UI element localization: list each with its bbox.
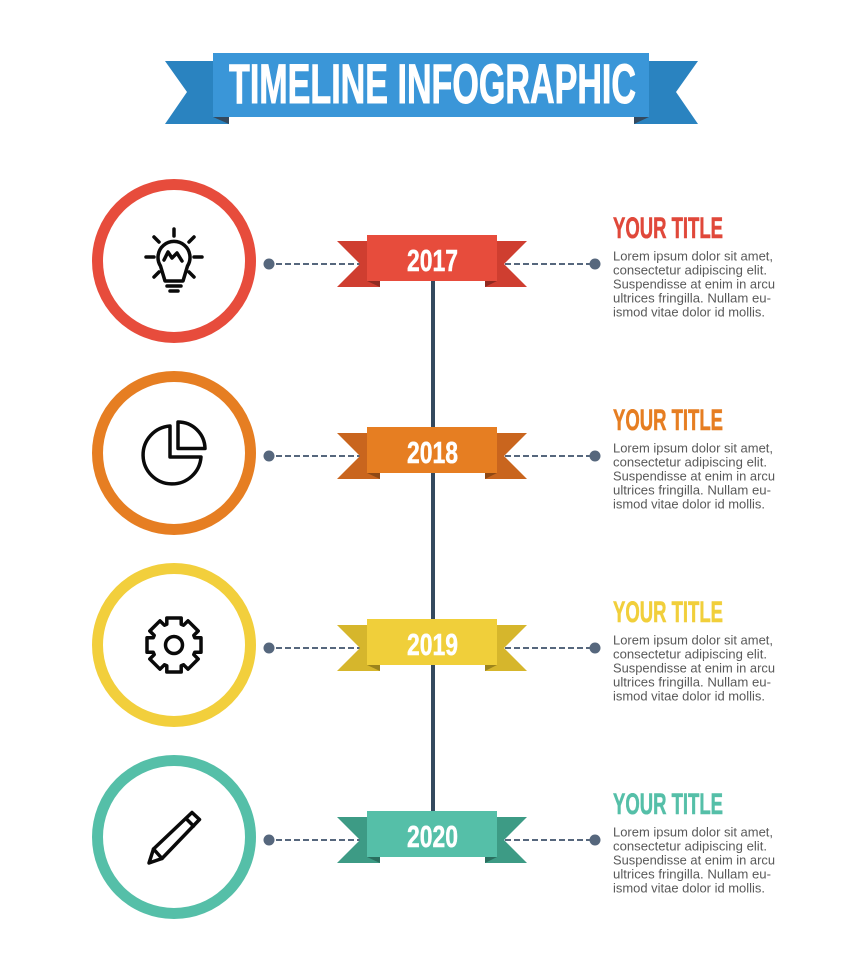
- milestone 2017: [98, 184, 775, 338]
- icon: pie chart: [143, 422, 205, 484]
- timeline vertical line: [431, 281, 435, 813]
- text block 2020: consectetur adipiscing elit.: [613, 840, 767, 854]
- text block 2017: Lorem ipsum dolor sit amet,: [613, 250, 773, 264]
- ribbon 2019: 2019: [407, 627, 458, 662]
- text block 2020: [613, 788, 775, 896]
- ribbon 2017: 2017: [407, 243, 458, 278]
- circle: 2017: [98, 184, 250, 338]
- text block 2019: Suspendisse at enim in arcu: [613, 662, 775, 676]
- text block 2017: Suspendisse at enim in arcu: [613, 278, 775, 292]
- text block 2020: ultrices fringilla. Nullam eu-: [613, 868, 771, 882]
- text block 2017: YOUR TITLE: [613, 212, 723, 245]
- text block 2018: Suspendisse at enim in arcu: [613, 470, 775, 484]
- text block 2017: ultrices fringilla. Nullam eu-: [613, 292, 771, 306]
- title banner: [165, 52, 698, 124]
- text block 2019: consectetur adipiscing elit.: [613, 648, 767, 662]
- ribbon 2020: 2020: [407, 819, 458, 854]
- connector right 2018: [505, 450, 600, 462]
- ribbon 2018: 2018: [407, 435, 458, 470]
- text block 2018: YOUR TITLE: [613, 404, 723, 437]
- connector left 2020: [264, 834, 360, 846]
- milestone 2019: [98, 568, 775, 722]
- icon: gear: [147, 618, 201, 672]
- text block 2019: [613, 596, 775, 704]
- circle: 2018: [98, 376, 250, 530]
- milestone 2020: [98, 760, 775, 914]
- milestone 2018: [98, 376, 775, 530]
- connector left 2018: [264, 450, 360, 462]
- text block 2018: ismod vitae dolor id mollis.: [613, 498, 765, 512]
- icon: pencil: [149, 812, 200, 863]
- circle: 2020: [98, 760, 250, 914]
- connector right 2017: [505, 258, 600, 270]
- text block 2018: consectetur adipiscing elit.: [613, 456, 767, 470]
- text block 2018: ultrices fringilla. Nullam eu-: [613, 484, 771, 498]
- connector left 2019: [264, 642, 360, 654]
- text block 2017: [613, 212, 775, 320]
- text block 2019: YOUR TITLE: [613, 596, 723, 629]
- ribbon 2019: [337, 619, 527, 671]
- text block 2020: Suspendisse at enim in arcu: [613, 854, 775, 868]
- text block 2018: [613, 404, 775, 512]
- ribbon 2017: [337, 235, 527, 287]
- text block 2017: ismod vitae dolor id mollis.: [613, 306, 765, 320]
- ribbon 2018: [337, 427, 527, 479]
- text block 2020: Lorem ipsum dolor sit amet,: [613, 826, 773, 840]
- connector left 2017: [264, 258, 360, 270]
- text block 2019: ultrices fringilla. Nullam eu-: [613, 676, 771, 690]
- text block 2018: Lorem ipsum dolor sit amet,: [613, 442, 773, 456]
- text block 2017: consectetur adipiscing elit.: [613, 264, 767, 278]
- connector right 2019: [505, 642, 600, 654]
- circle: 2019: [98, 568, 250, 722]
- text block 2020: YOUR TITLE: [613, 788, 723, 821]
- connector right 2020: [505, 834, 600, 846]
- ribbon 2020: [337, 811, 527, 863]
- text block 2020: ismod vitae dolor id mollis.: [613, 882, 765, 896]
- text block 2019: Lorem ipsum dolor sit amet,: [613, 634, 773, 648]
- icon: light bulb: [146, 229, 202, 291]
- text block 2019: ismod vitae dolor id mollis.: [613, 690, 765, 704]
